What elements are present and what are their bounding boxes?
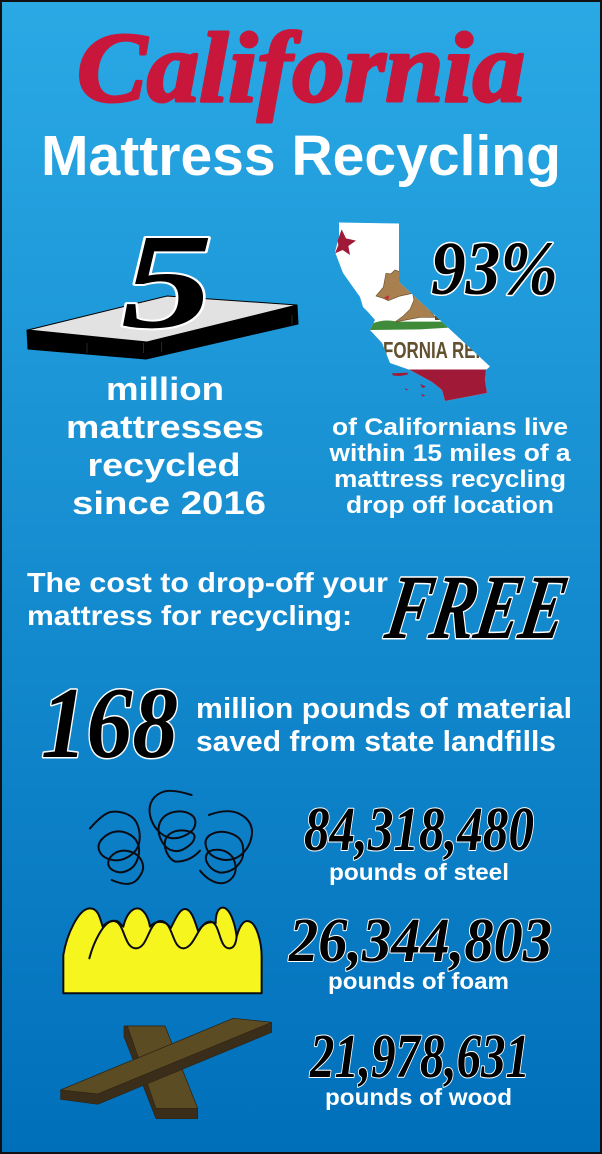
label: pounds of wood: pounds of wood xyxy=(325,1084,512,1110)
label: pounds of foam: pounds of foam xyxy=(328,968,509,994)
stat number: 168: 168 xyxy=(41,667,178,780)
icon: steel coils xyxy=(90,791,252,884)
text: million pounds saved: saved from state landfills xyxy=(196,726,556,758)
text: of Californians live within 15 miles: of Californians live xyxy=(332,414,568,441)
text: million mattresses recycled since 2016: million xyxy=(106,371,224,407)
text: of Californians live within 15 miles: mattress recycling xyxy=(334,466,566,493)
icon: mattress xyxy=(27,296,298,359)
text: million pounds saved xyxy=(196,693,572,758)
stat number: 5: 5 xyxy=(121,207,213,357)
text: of Californians live within 15 miles: within 15 miles of a xyxy=(328,440,571,467)
text: million mattresses recycled since 2016: recycled xyxy=(88,447,241,483)
title: California: California xyxy=(77,12,525,123)
stat number: 21,978,631: 21,978,631 xyxy=(309,1023,530,1091)
text: million mattresses recycled since 2016 xyxy=(66,371,266,521)
text: of Californians live within 15 miles xyxy=(328,414,571,519)
icon: foam xyxy=(63,908,262,993)
text: of Californians live within 15 miles: drop off location xyxy=(346,492,554,519)
text: million mattresses recycled since 2016: since 2016 xyxy=(72,485,266,521)
text: cost to drop-off xyxy=(27,567,388,631)
stat number: 93%: 93% xyxy=(431,227,558,311)
icon: California flag map: FORNIA REPU xyxy=(383,337,499,363)
text: cost to drop-off: The cost to drop-off your xyxy=(27,567,388,598)
icon: California flag map xyxy=(335,222,490,401)
subtitle: Mattress Recycling: Mattress Recycling xyxy=(41,124,561,188)
stat number: 84,318,480: 84,318,480 xyxy=(304,796,534,864)
text: million pounds saved: million pounds of material xyxy=(196,693,572,725)
text: million mattresses recycled since 2016: mattresses xyxy=(66,409,264,445)
stat number: 26,344,803: 26,344,803 xyxy=(288,907,552,975)
icon: wood planks xyxy=(61,1018,272,1119)
label: pounds of steel: pounds of steel xyxy=(329,859,509,885)
text: cost to drop-off: mattress for recycling: xyxy=(27,600,352,631)
